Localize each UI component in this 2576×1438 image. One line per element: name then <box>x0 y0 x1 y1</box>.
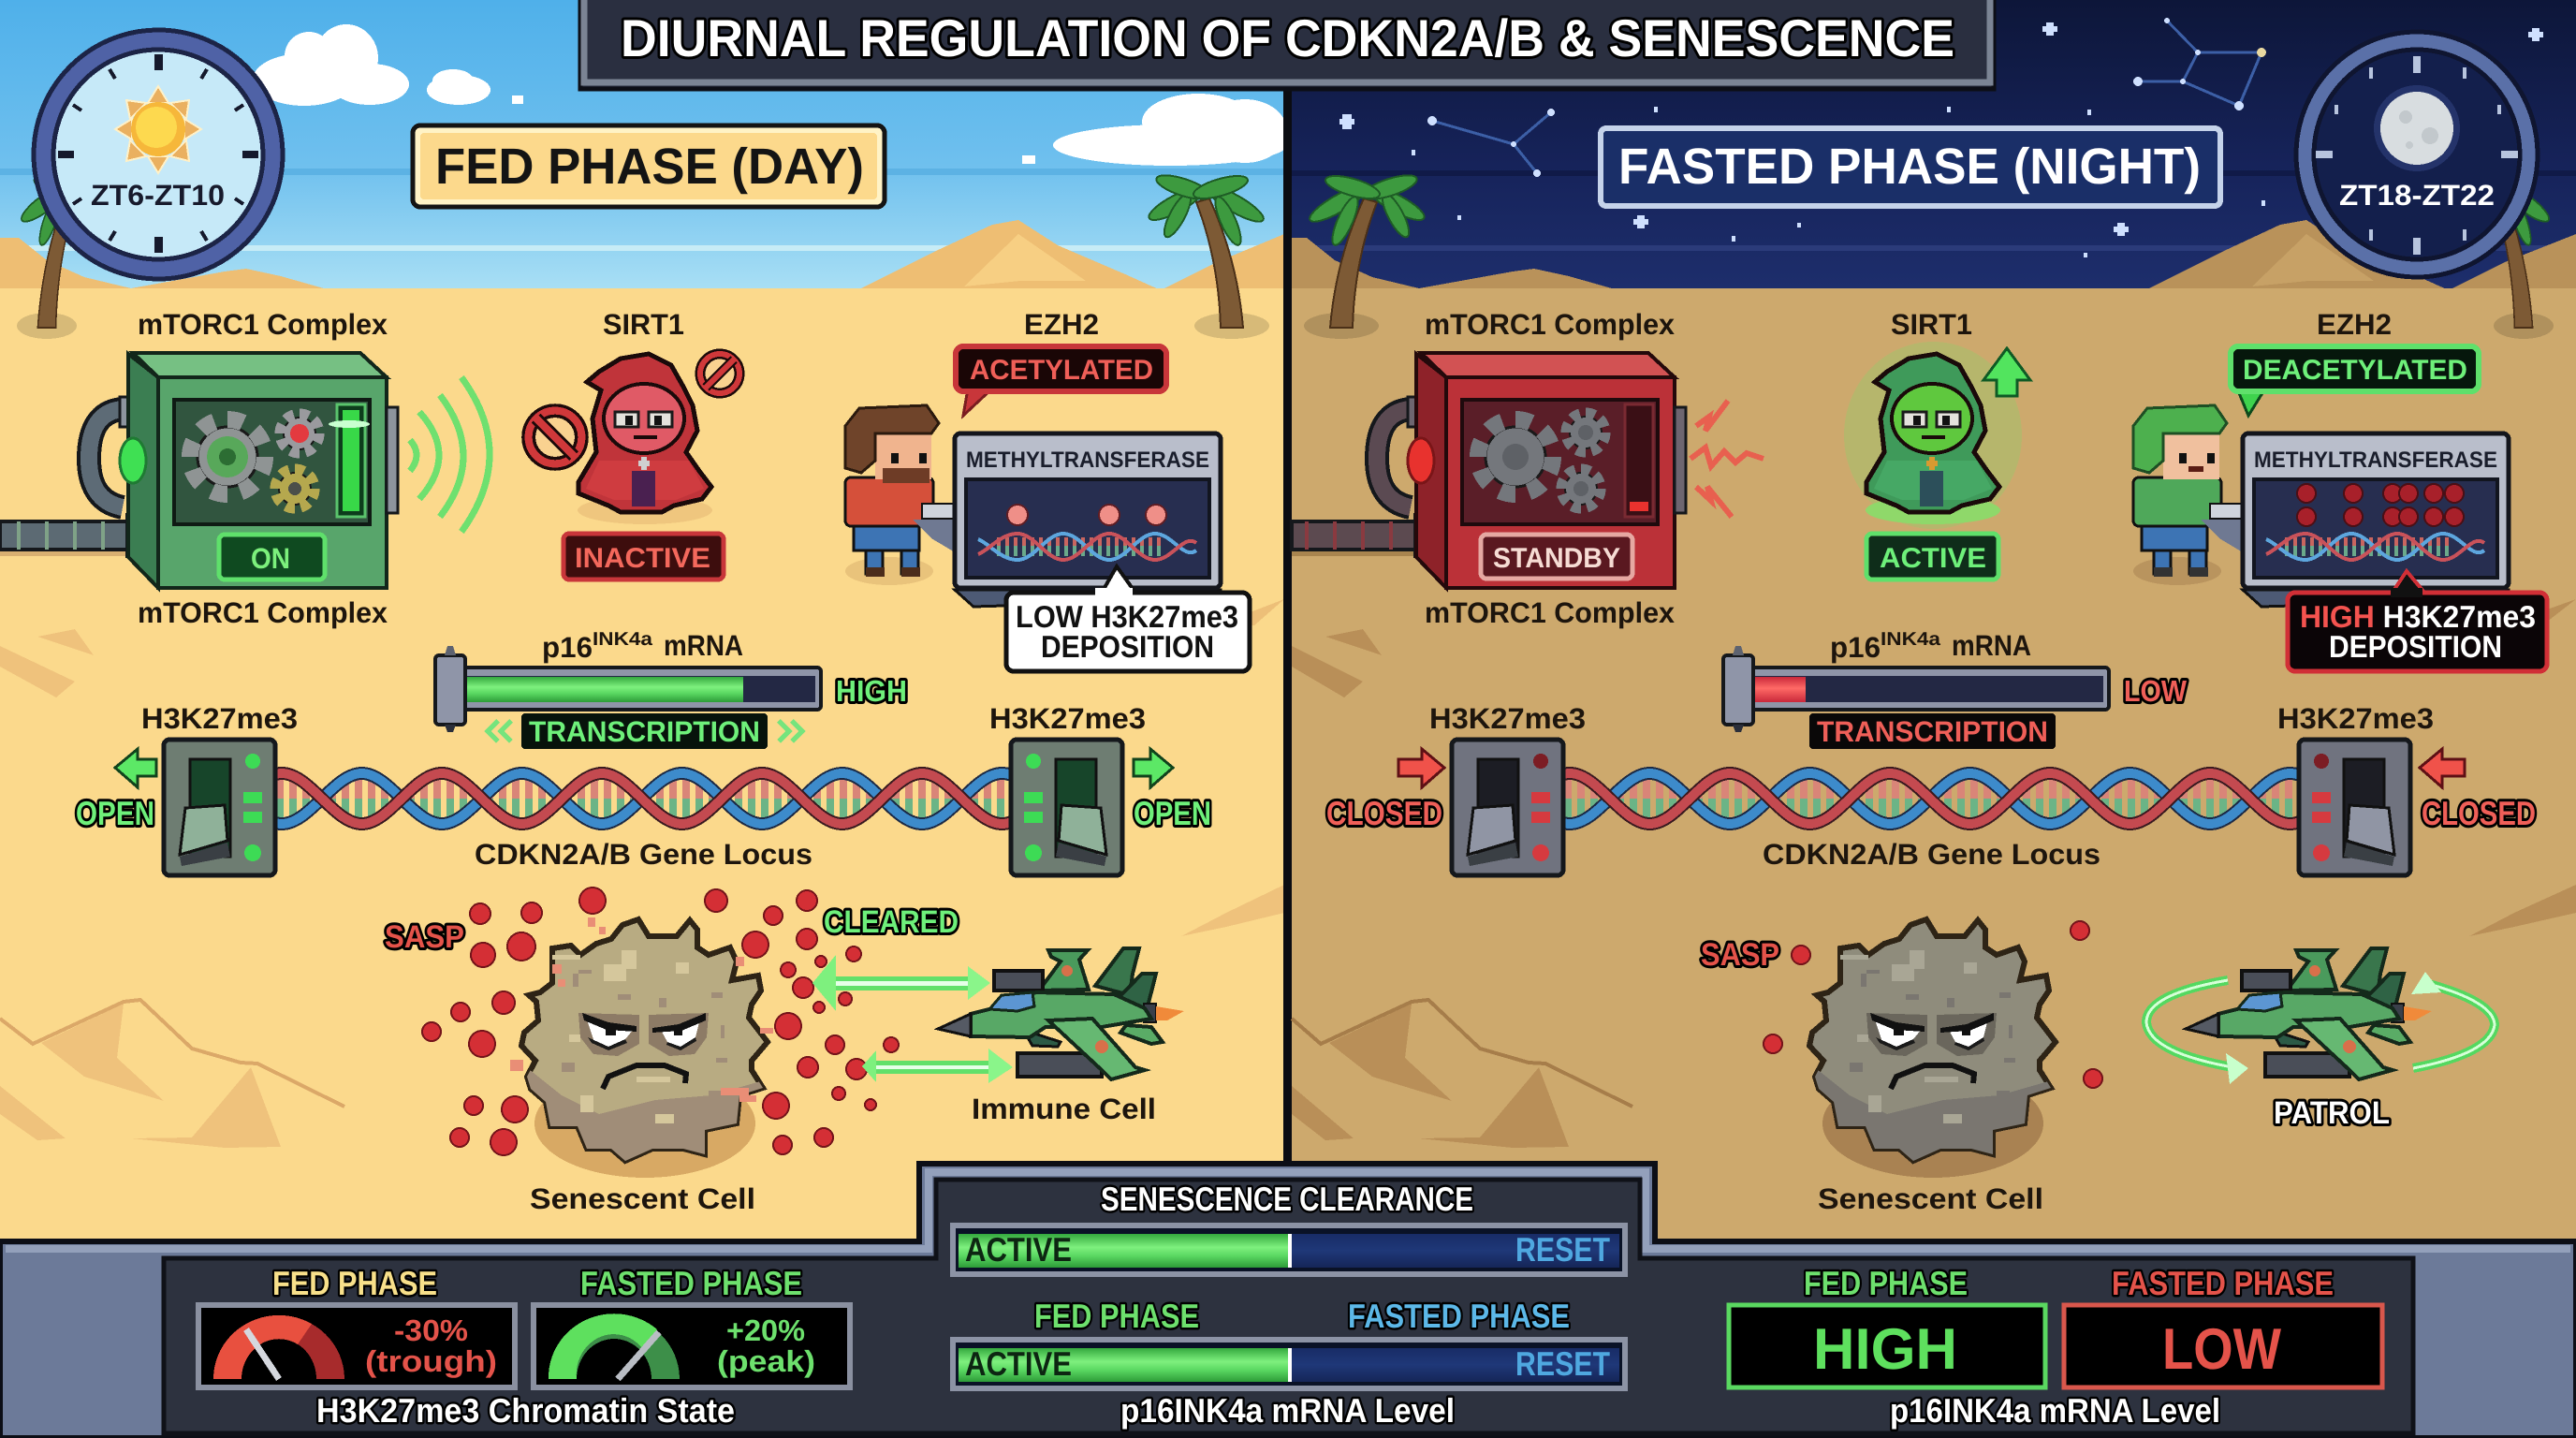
immune cell jet <box>938 948 1184 1079</box>
section: p16 mRNA level: FED PHASE <box>1804 1264 1968 1302</box>
attack beams <box>812 955 1013 1083</box>
dunes: night foreground <box>1292 599 2576 1148</box>
badge: ON: ON <box>251 542 290 575</box>
heading: fasted phase (night) <box>1601 128 2220 206</box>
machine: mTORC1 on <box>0 353 398 588</box>
senescent cell fasted <box>1803 919 2065 1178</box>
label: H3K27me3 left: H3K27me3 <box>1429 702 1586 735</box>
label: mTORC1 complex top: mTORC1 Complex <box>138 308 388 341</box>
badge: STANDBY <box>1481 535 1632 579</box>
badge: transcription <box>488 713 802 749</box>
pipe <box>0 515 146 556</box>
palm tree right <box>2454 170 2554 339</box>
section: senescence clearance: FED PHASE <box>1034 1297 1199 1335</box>
SASP particles <box>422 888 899 1155</box>
gauge: fed: -30% <box>394 1313 468 1347</box>
palm tree right <box>1146 170 1269 339</box>
readout: high <box>1729 1305 2045 1387</box>
label: EZH2: EZH2 <box>1024 308 1099 341</box>
palm tree left <box>1304 170 1427 339</box>
section: chromatin state <box>198 1264 850 1430</box>
icon: inactive SIRT1 figure <box>578 354 712 524</box>
bar: p16 mRNA low <box>1723 646 2109 732</box>
label: immune cell: Immune Cell <box>972 1093 1156 1125</box>
label: p16 INK4a mRNA: INK4a <box>1881 629 1941 650</box>
heading: fed phase (day) <box>413 125 885 207</box>
divider between panels <box>1283 84 1292 1245</box>
patrol jet <box>2186 948 2432 1079</box>
section: senescence clearance: SENESCENCE CLEARANCE <box>1101 1180 1473 1218</box>
status: patrol: PATROL <box>2274 1095 2390 1131</box>
icon: sun <box>115 86 201 173</box>
clock label: ZT6-ZT10 <box>91 179 225 212</box>
callout: high H3K27me3 deposition: HIGH H3K27me3 <box>2300 599 2536 634</box>
mini DNA <box>978 534 1196 560</box>
signal waves <box>410 377 490 532</box>
status: closed left: CLOSED <box>1326 794 1442 832</box>
monitor: methyltransferase fed <box>955 433 1221 607</box>
section: senescence clearance <box>953 1180 1625 1430</box>
scientist: EZH2 fasted <box>2133 405 2243 585</box>
status: open left: OPEN <box>76 794 154 832</box>
clock label: ZT18-ZT22 <box>2339 179 2495 212</box>
arrow left <box>1398 749 1444 787</box>
badge: ON <box>219 535 325 580</box>
status: cleared: CLEARED <box>824 904 959 940</box>
label: p16 INK4a mRNA: mRNA <box>664 629 743 662</box>
label: EZH2: EZH2 <box>2317 308 2392 341</box>
status: SASP: SASP <box>385 919 464 955</box>
machine: mTORC1 standby <box>1292 353 1686 588</box>
label: p16 INK4a mRNA: INK4a <box>593 629 653 650</box>
status: open right: OPEN <box>1134 794 1211 832</box>
monitor: methyltransferase fasted: METHYLTRANSFERASE <box>2254 448 2497 473</box>
dunes: night horizon <box>1292 220 2576 316</box>
arrow left <box>115 749 156 787</box>
badge: transcription: TRANSCRIPTION <box>529 715 760 748</box>
gauge: fed: (trough) <box>365 1344 497 1378</box>
label: H3K27me3 right: H3K27me3 <box>2277 702 2434 735</box>
section: p16 mRNA level <box>1729 1264 2382 1430</box>
arrow right <box>2420 749 2465 787</box>
status: SASP: SASP <box>1701 937 1779 973</box>
callout: high H3K27me3 deposition: DEPOSITION <box>2329 629 2502 664</box>
bubble: deacetylated <box>2231 346 2479 416</box>
badge: inactive <box>564 534 724 580</box>
arrow right <box>1134 749 1173 787</box>
label: p16 INK4a mRNA <box>542 629 743 664</box>
DNA helix: CDKN2A/B <box>1490 773 2370 824</box>
callout: high H3K27me3 deposition <box>2288 571 2547 671</box>
pipe <box>1292 515 1434 556</box>
status: closed right: CLOSED <box>2422 794 2536 832</box>
senescent cell fed <box>515 919 777 1178</box>
gauge: fasted <box>534 1305 850 1387</box>
title banner: DIURNAL REGULATION OF CDKN2A/B & SENESCENCE <box>621 8 1954 67</box>
mini DNA <box>2266 534 2484 560</box>
label: mTORC1 complex top: mTORC1 Complex <box>1425 308 1676 341</box>
callout: low H3K27me3 deposition <box>1006 566 1250 671</box>
section: chromatin state: H3K27me3 Chromatin State <box>316 1391 735 1430</box>
gauge: fasted: (peak) <box>717 1344 815 1378</box>
label: mTORC1 complex bottom: mTORC1 Complex <box>1425 596 1676 629</box>
bubble: acetylated: ACETYLATED <box>970 355 1153 386</box>
patrol arcs <box>2146 972 2495 1084</box>
label: gene locus: CDKN2A/B Gene Locus <box>475 838 812 871</box>
title banner <box>580 0 1994 89</box>
progress bar: clearance <box>953 1225 1625 1274</box>
icon: prohibition large <box>529 411 581 463</box>
icon: prohibition small <box>700 354 739 393</box>
section: p16 mRNA level: FASTED PHASE <box>2112 1264 2334 1302</box>
status: LOW: LOW <box>2124 674 2188 708</box>
dunes: foreground <box>0 599 1284 1148</box>
callout: low H3K27me3 deposition: LOW H3K27me3 <box>1016 599 1238 634</box>
progress bar: reset: ACTIVE <box>965 1344 1072 1383</box>
readout: low <box>2064 1305 2382 1387</box>
label: SIRT1: SIRT1 <box>603 308 684 341</box>
switch right closed <box>2299 740 2410 875</box>
methylation marks <box>1007 505 1166 525</box>
switch right open <box>1011 740 1122 875</box>
bubble: deacetylated: DEACETYLATED <box>2243 355 2467 386</box>
panel: fasted phase night <box>1292 0 2576 1245</box>
badge: active <box>1866 534 1998 580</box>
glow behind SIRT1 <box>1844 342 2022 529</box>
label: H3K27me3 left: H3K27me3 <box>141 702 298 735</box>
progress bar: reset <box>953 1340 1625 1388</box>
section: senescence clearance: FASTED PHASE <box>1348 1297 1570 1335</box>
label: senescent cell: Senescent Cell <box>1818 1182 2043 1215</box>
level bar <box>329 404 370 517</box>
label: gene locus: CDKN2A/B Gene Locus <box>1763 838 2100 871</box>
clock: ZT18-ZT22 <box>2296 32 2538 277</box>
icon: moon <box>2374 85 2460 171</box>
icon: up arrow <box>1983 348 2030 396</box>
badge: active: ACTIVE <box>1880 543 1986 574</box>
heading: fed phase (day): FED PHASE (DAY) <box>435 139 864 195</box>
gauge: fed <box>198 1305 515 1387</box>
progress bar: clearance: RESET <box>1515 1230 1610 1269</box>
section: chromatin state: FED PHASE <box>272 1264 437 1302</box>
icon: active SIRT1 figure <box>1866 354 2000 524</box>
red sparks <box>1690 401 1764 517</box>
heading: fasted phase (night): FASTED PHASE (NIGHT) <box>1618 139 2201 195</box>
label: H3K27me3 right: H3K27me3 <box>989 702 1146 735</box>
clouds <box>253 24 1287 166</box>
gears <box>1478 413 1605 508</box>
dunes: horizon <box>0 220 1284 316</box>
palm tree left <box>17 170 116 339</box>
monitor: methyltransferase fed: METHYLTRANSFERASE <box>966 448 1209 473</box>
section: chromatin state: FASTED PHASE <box>580 1264 802 1302</box>
gauge: fasted: +20% <box>726 1313 805 1347</box>
badge: inactive: INACTIVE <box>575 543 710 574</box>
stars and constellations <box>1339 18 2543 257</box>
section: p16 mRNA level: p16INK4a mRNA Level <box>1890 1391 2220 1430</box>
switch left open <box>164 740 275 875</box>
section: senescence clearance: p16INK4a mRNA Level <box>1120 1391 1455 1430</box>
label: p16 INK4a mRNA <box>1830 629 2031 664</box>
SASP particles <box>1764 921 2102 1088</box>
readout: low: LOW <box>2162 1317 2281 1382</box>
progress bar: reset: RESET <box>1515 1344 1610 1383</box>
label: p16 INK4a mRNA: p16 <box>1830 631 1881 664</box>
dashboard: bottom control panel <box>0 1164 2576 1438</box>
label: mTORC1 complex bottom: mTORC1 Complex <box>138 596 388 629</box>
status: HIGH: HIGH <box>836 674 907 708</box>
monitor: methyltransferase fasted <box>2243 433 2509 607</box>
switch left closed <box>1452 740 1563 875</box>
clock: ZT6-ZT10 <box>34 30 283 279</box>
sky: night <box>1292 0 2576 301</box>
bar: p16 mRNA high <box>435 646 821 732</box>
badge: transcription: TRANSCRIPTION <box>1817 715 2048 748</box>
methylation marks <box>2297 484 2464 526</box>
label: senescent cell: Senescent Cell <box>530 1182 755 1215</box>
panel: fed phase day <box>0 0 1287 1245</box>
label: p16 INK4a mRNA: mRNA <box>1952 629 2031 662</box>
gears <box>190 414 319 508</box>
callout: low H3K27me3 deposition: DEPOSITION <box>1041 629 1214 664</box>
level bar <box>1625 404 1653 517</box>
badge: STANDBY: STANDBY <box>1493 543 1620 574</box>
label: p16 INK4a mRNA: p16 <box>542 631 593 664</box>
bubble: acetylated <box>956 346 1166 416</box>
sky: day <box>0 0 1284 301</box>
readout: high: HIGH <box>1813 1317 1957 1382</box>
progress bar: clearance: ACTIVE <box>965 1230 1072 1269</box>
scientist: EZH2 fed <box>845 405 955 585</box>
label: SIRT1: SIRT1 <box>1891 308 1972 341</box>
DNA helix: CDKN2A/B <box>202 773 1082 824</box>
